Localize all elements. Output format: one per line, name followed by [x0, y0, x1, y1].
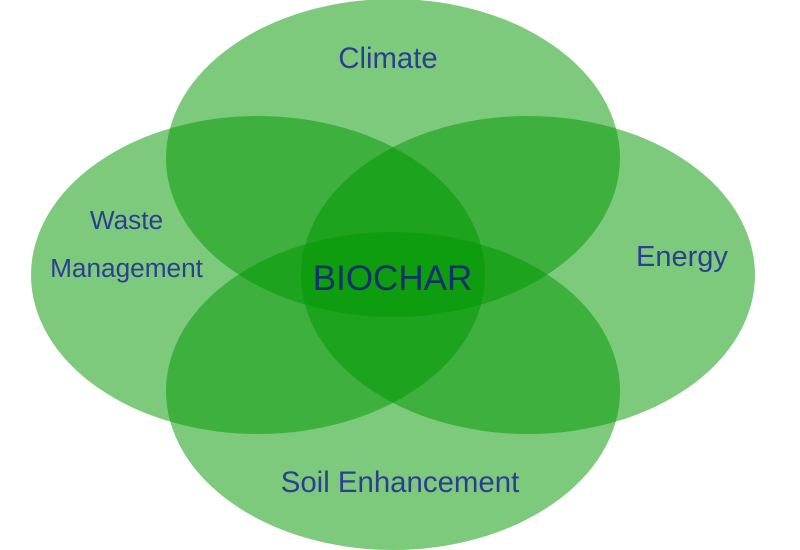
- label: Soil Enhancement: Soil Enhancement: [281, 466, 519, 499]
- label: Waste Management: [50, 205, 204, 283]
- label: Climate: Climate: [338, 42, 438, 75]
- ellipse: climate: [166, 0, 620, 317]
- center label: BIOCHAR: BIOCHAR: [313, 259, 472, 298]
- ellipse: soil enhancement: [166, 232, 620, 550]
- label: Energy: Energy: [636, 241, 728, 273]
- ellipse: energy: [301, 116, 755, 434]
- ellipse: waste management: [31, 116, 485, 434]
- label line: Management: Management: [50, 253, 204, 283]
- label line: Waste: Waste: [90, 205, 163, 235]
